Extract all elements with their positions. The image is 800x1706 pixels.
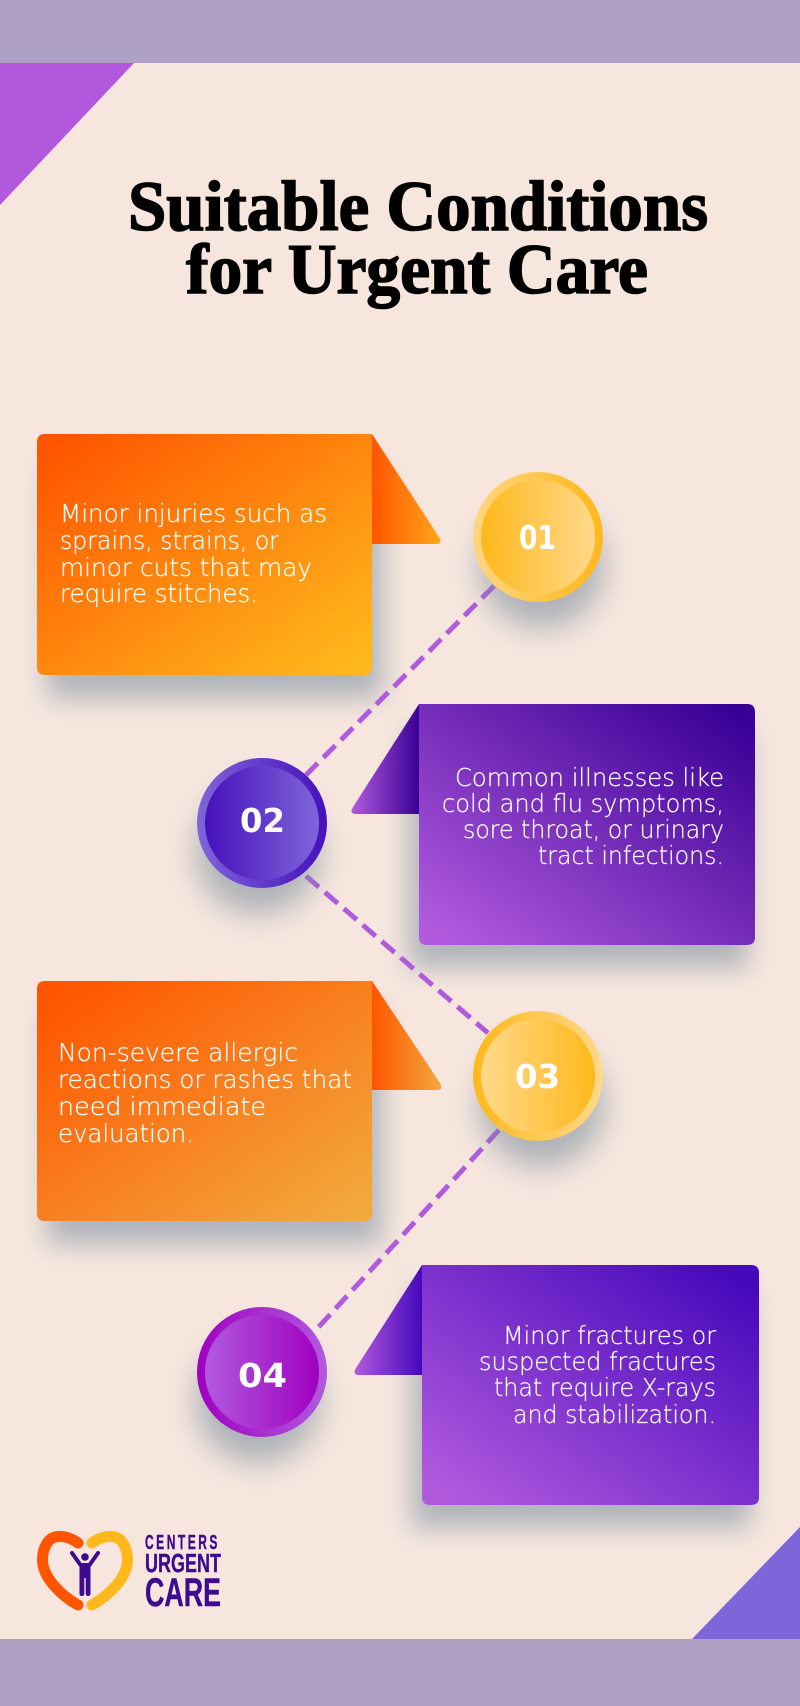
card 3 text — [58, 1038, 352, 1148]
callout pointer 1 — [372, 434, 440, 544]
card 1 text: sprains, strains, or — [60, 526, 280, 555]
logo wordmark: CENTERS — [145, 1532, 220, 1554]
callout pointer 2 — [352, 704, 419, 814]
step 2 panel — [197, 704, 755, 945]
card 1 text: Minor injuries such as — [60, 499, 327, 528]
card 2 text — [442, 763, 724, 870]
card 4 text: and stabilization. — [513, 1400, 716, 1429]
card 3 text: evaluation. — [58, 1119, 194, 1148]
card 3 text: Non-severe allergic — [58, 1038, 298, 1067]
title: Suitable Conditions — [128, 168, 708, 246]
card 3 text: reactions or rashes that — [58, 1065, 352, 1094]
badge 03: 03 — [515, 1057, 560, 1096]
logo — [42, 1532, 221, 1615]
corner triangle: bottom right — [692, 1527, 800, 1639]
logo wordmark — [145, 1532, 221, 1615]
badge 03 — [473, 1011, 603, 1141]
card 3 — [37, 981, 372, 1221]
icon: heart right — [92, 1536, 128, 1605]
corner triangle: top left — [0, 63, 134, 205]
title: for Urgent Care — [186, 231, 648, 309]
step 4 panel — [197, 1265, 759, 1505]
card 2 text: cold and flu symptoms, — [442, 789, 724, 818]
badge 01: 01 — [519, 518, 556, 557]
badge 04 — [197, 1307, 327, 1437]
card 4 text: Minor fractures or — [503, 1321, 717, 1350]
card 4 text: that require X-rays — [494, 1373, 716, 1402]
badge 04: 04 — [238, 1356, 287, 1395]
card 1 — [37, 434, 372, 675]
badge 01 — [473, 472, 603, 602]
card 4 text: suspected fractures — [479, 1347, 716, 1376]
step 1 panel — [37, 434, 603, 675]
badge 02 — [197, 758, 327, 888]
logo wordmark: URGENT — [145, 1548, 221, 1578]
top band — [0, 0, 800, 63]
icon: person — [72, 1553, 98, 1596]
bottom band — [0, 1639, 800, 1706]
card 1 text: require stitches. — [60, 579, 258, 608]
callout pointer 4 — [355, 1265, 422, 1375]
card 4 — [422, 1265, 759, 1505]
card 2 — [419, 704, 755, 945]
card 1 text: minor cuts that may — [60, 553, 312, 582]
dashed connector lines — [306, 586, 499, 1331]
logo wordmark: CARE — [145, 1571, 221, 1615]
card 1 text — [60, 499, 327, 608]
card 2 text: tract infections. — [538, 841, 724, 870]
circle shadows — [196, 504, 604, 1463]
title — [128, 168, 708, 309]
card 2 text: Common illnesses like — [455, 763, 724, 792]
callout pointer 3 — [372, 981, 441, 1090]
card 4 text — [479, 1321, 717, 1429]
card 2 text: sore throat, or urinary — [463, 815, 724, 844]
card 3 text: need immediate — [58, 1092, 266, 1121]
card shadows — [47, 470, 750, 1528]
step 3 panel — [37, 981, 603, 1221]
badge 02: 02 — [240, 801, 285, 840]
icon: heart left — [42, 1536, 78, 1605]
